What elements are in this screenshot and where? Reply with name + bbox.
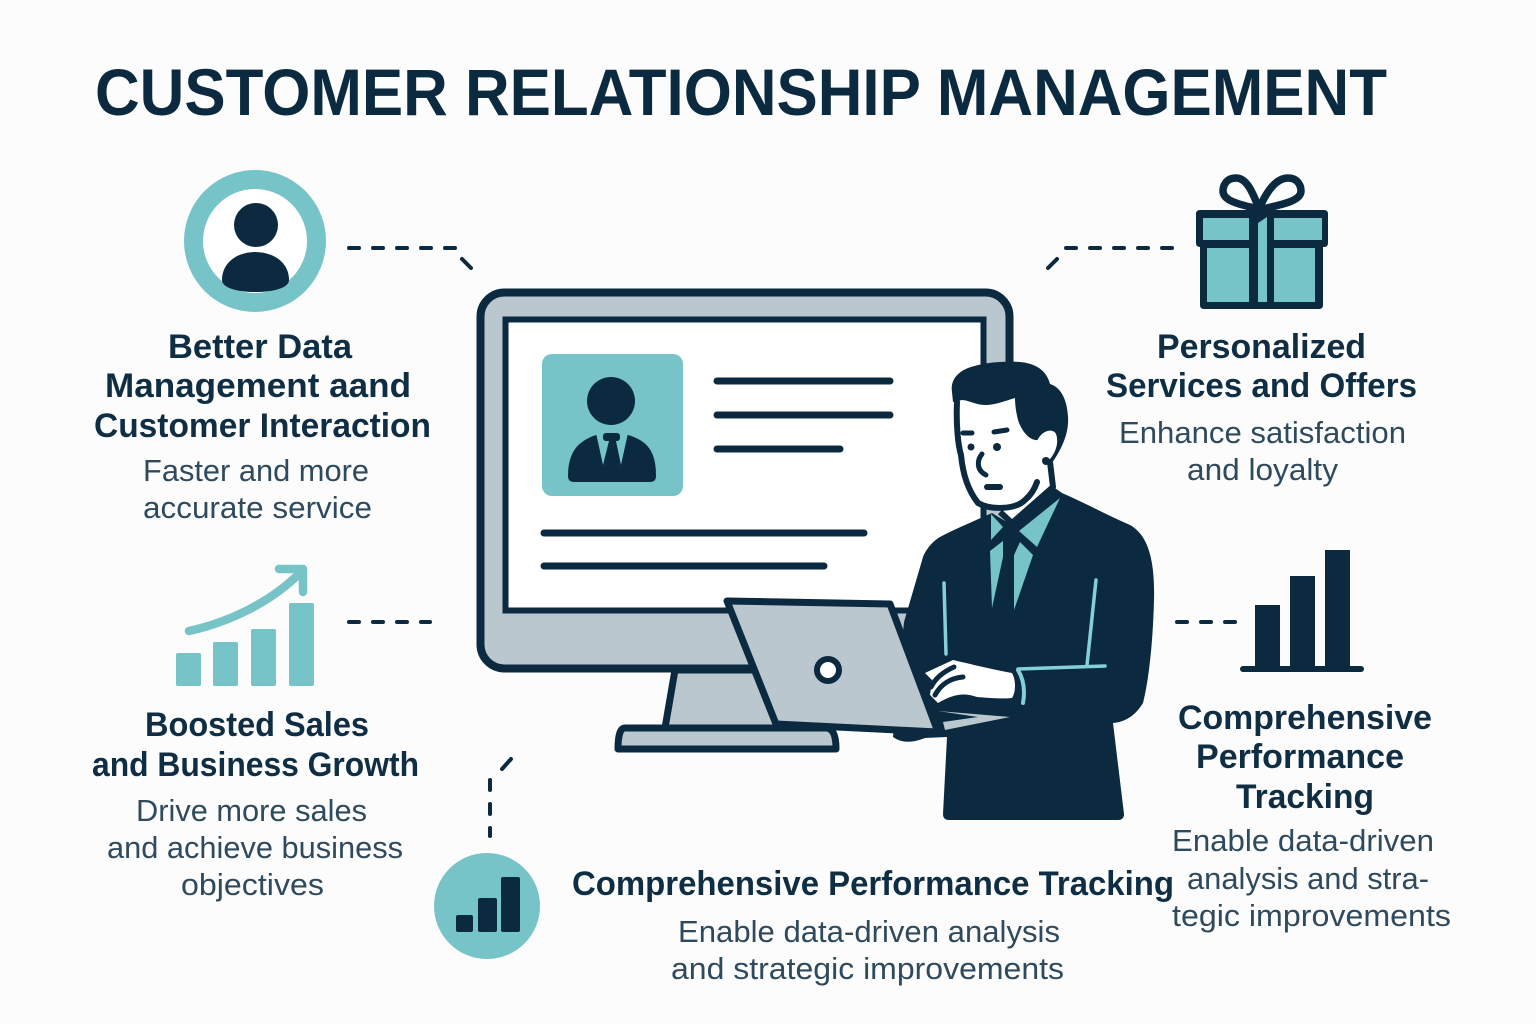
neck and shirt bbox=[1000, 450, 1053, 523]
text block: personalized services bbox=[1106, 328, 1417, 487]
text block: comprehensive performance tracking right: Comprehensive bbox=[1178, 699, 1432, 737]
profile card on screen bbox=[542, 354, 683, 496]
text block: better data management: Faster and more bbox=[143, 453, 369, 488]
text block: better data management: Customer Interaction bbox=[94, 407, 431, 445]
text block: comprehensive performance tracking bottom bbox=[572, 865, 1174, 986]
text block: comprehensive performance tracking bottom: Enable data-driven analysis bbox=[678, 914, 1060, 949]
text block: better data management bbox=[94, 328, 431, 525]
icon: circle with bars bbox=[434, 853, 540, 959]
ear bbox=[1037, 431, 1057, 465]
icon: performance bars bbox=[1240, 550, 1364, 672]
text block: personalized services: Services and Offers bbox=[1106, 367, 1417, 405]
hand bbox=[925, 660, 1015, 703]
illustration: businessman bbox=[893, 362, 1154, 820]
screen text lines bbox=[544, 381, 890, 566]
text block: personalized services: Personalized bbox=[1157, 328, 1366, 366]
icon: gift box bbox=[1196, 178, 1328, 309]
connector: avatar to monitor bbox=[349, 248, 471, 268]
face bbox=[957, 395, 1048, 508]
text block: boosted sales: objectives bbox=[181, 867, 324, 902]
shirt collar and lapels bbox=[990, 498, 1060, 610]
text block: personalized services: Enhance satisfaction bbox=[1119, 415, 1406, 450]
text block: comprehensive performance tracking right: analysis and stra- bbox=[1187, 861, 1429, 896]
text block: boosted sales: and Business Growth bbox=[92, 746, 419, 784]
icon: growth bars with arrow bbox=[176, 569, 314, 686]
facial features bbox=[963, 430, 1007, 487]
laptop keyboard bbox=[938, 711, 1010, 730]
text block: boosted sales: Boosted Sales bbox=[145, 706, 369, 744]
text block: comprehensive performance tracking right: tegic improvements bbox=[1172, 898, 1451, 933]
hair bbox=[952, 362, 1068, 463]
text block: comprehensive performance tracking right: Enable data-driven bbox=[1172, 823, 1434, 858]
text block: boosted sales: and achieve business bbox=[107, 830, 403, 865]
text block: comprehensive performance tracking right: Tracking bbox=[1236, 778, 1374, 816]
text block: comprehensive performance tracking right bbox=[1172, 699, 1451, 933]
text block: better data management: Better Data bbox=[168, 328, 353, 366]
connector: gift to monitor bbox=[1048, 248, 1172, 268]
text block: boosted sales bbox=[92, 706, 419, 902]
connector: growth to monitor bbox=[349, 620, 430, 624]
sleeve seams bbox=[944, 580, 1105, 703]
suit body bbox=[893, 486, 1154, 820]
title: CUSTOMER RELATIONSHIP MANAGEMENT bbox=[95, 55, 1387, 129]
connector: bottom circle to monitor bbox=[490, 759, 511, 836]
text block: better data management: accurate service bbox=[143, 490, 372, 525]
connector: performance bars to monitor bbox=[1177, 620, 1235, 624]
text block: better data management: Management aand bbox=[105, 367, 411, 405]
text block: comprehensive performance tracking bottom: Comprehensive Performance Tracking bbox=[572, 865, 1174, 903]
text block: boosted sales: Drive more sales bbox=[136, 793, 367, 828]
text block: comprehensive performance tracking right: Performance bbox=[1196, 738, 1404, 776]
icon: customer avatar bbox=[194, 180, 316, 302]
illustration: desktop monitor bbox=[480, 292, 1010, 749]
text block: comprehensive performance tracking bottom: and strategic improvements bbox=[671, 951, 1064, 986]
text block: personalized services: and loyalty bbox=[1187, 452, 1338, 487]
illustration: laptop bbox=[727, 601, 938, 732]
